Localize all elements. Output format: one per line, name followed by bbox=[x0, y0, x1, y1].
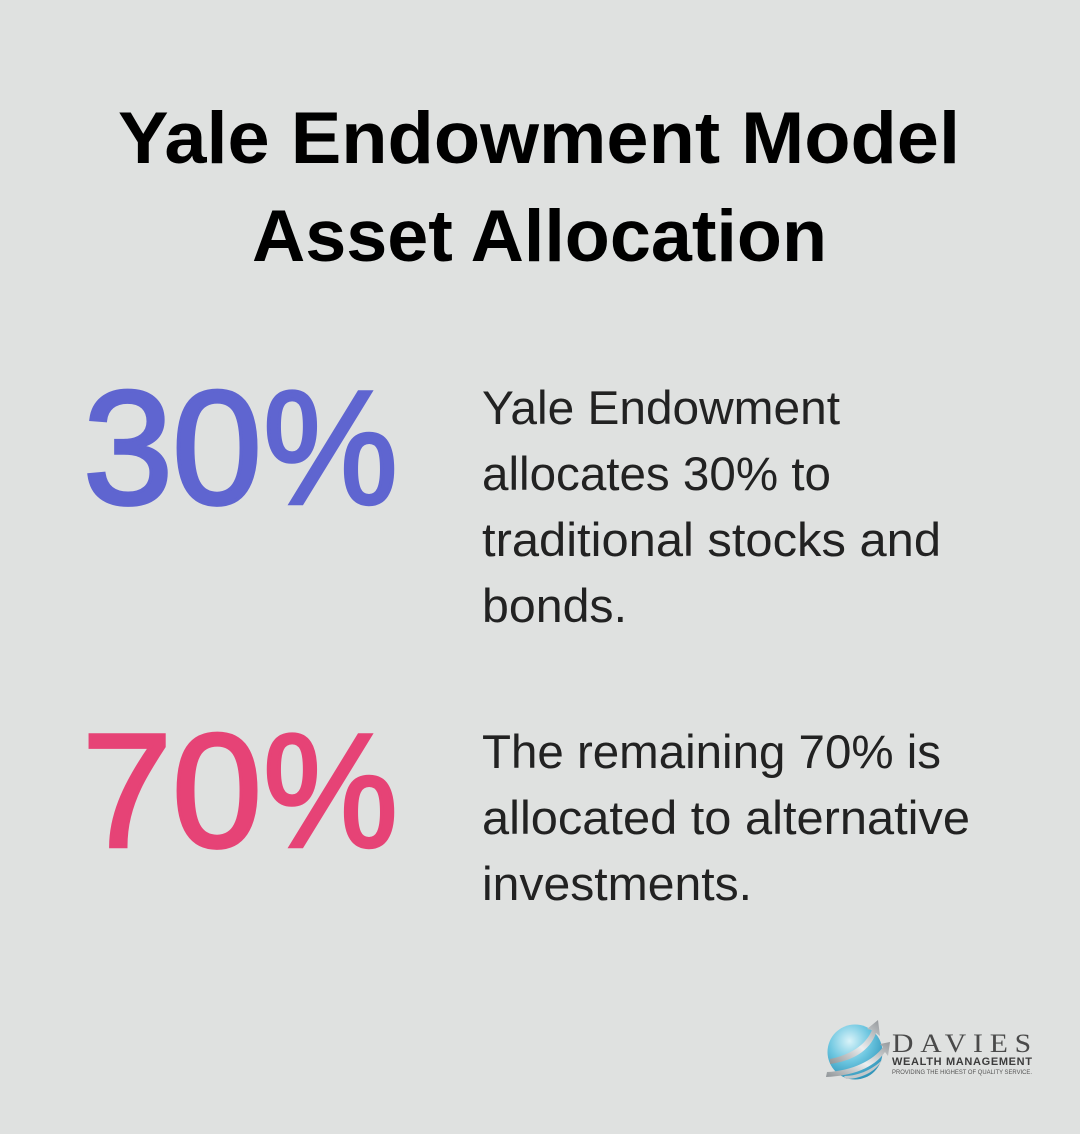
icon: globe with arrows bbox=[826, 1020, 890, 1080]
logo subtitle: WEALTH MANAGEMENT bbox=[892, 1056, 1032, 1068]
stat: 30%: 0 bbox=[172, 358, 262, 538]
logo wordmark: DAVIES bbox=[892, 1029, 1038, 1058]
text block: 70% description: allocated to alternative bbox=[482, 791, 970, 844]
title: Asset Allocation bbox=[252, 196, 827, 277]
stat: 70%: % bbox=[263, 700, 398, 882]
text block: 70% description: investments. bbox=[482, 857, 752, 910]
text block: 30% description: Yale Endowment bbox=[482, 381, 840, 434]
title bbox=[118, 98, 960, 277]
text block: 70% description bbox=[482, 725, 970, 910]
stat: 70% bbox=[82, 700, 398, 882]
logo tagline: PROVIDING THE HIGHEST OF QUALITY SERVICE. bbox=[892, 1069, 1032, 1076]
title: Yale Endowment Model bbox=[118, 98, 960, 179]
stat: 30% bbox=[83, 358, 398, 538]
text block: 30% description bbox=[482, 381, 941, 632]
stat: 30%: % bbox=[263, 358, 398, 538]
text block: 30% description: bonds. bbox=[482, 579, 627, 632]
text block: 30% description: allocates 30% to bbox=[482, 447, 831, 500]
stat: 70%: 7 bbox=[82, 700, 172, 882]
logo: Davies Wealth Management bbox=[826, 1020, 1038, 1080]
text block: 70% description: The remaining 70% is bbox=[482, 725, 941, 778]
stat: 30%: 3 bbox=[83, 358, 173, 538]
stat: 70%: 0 bbox=[172, 700, 262, 882]
text block: 30% description: traditional stocks and bbox=[482, 513, 941, 566]
